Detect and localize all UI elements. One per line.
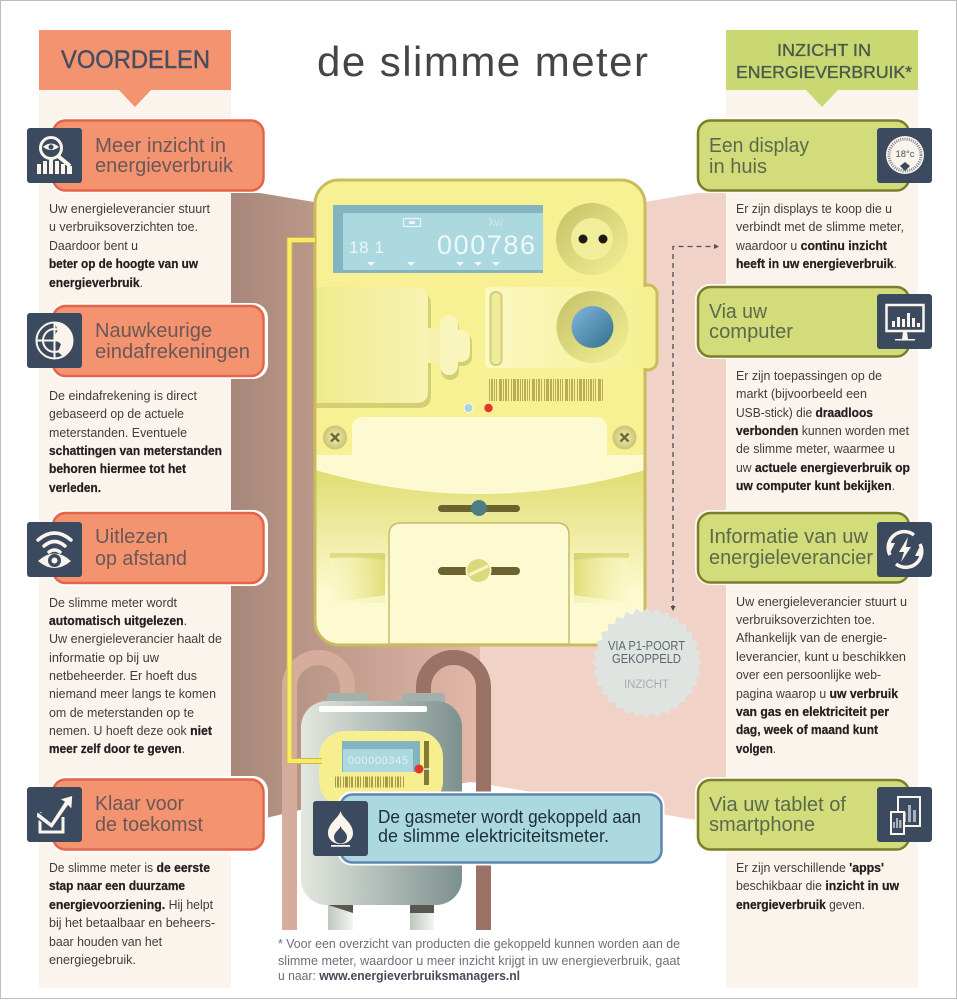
text block: klaar voor de toekomst <box>49 861 215 967</box>
badge text: VIA P1-POORT <box>608 639 685 653</box>
text block: nauwkeurige eindafrekeningen <box>49 389 222 495</box>
text block: meer inzicht: Uw energieleverancier stuurt <box>49 202 211 216</box>
footnote: * Voor een overzicht van producten die gekoppeld kunnen worden aan de <box>278 937 680 951</box>
text block: klaar voor de toekomst: energievoorziening. Hij helpt <box>49 898 214 912</box>
heading: voordelen <box>39 30 231 107</box>
text block: nauwkeurige eindafrekeningen: De eindafrekening is direct <box>49 389 198 403</box>
pipe: left gas pipe <box>290 658 348 930</box>
card title <box>95 793 203 836</box>
text block: uitlezen op afstand: niemand meer langs te komen <box>49 687 216 701</box>
text block: een display in huis: heeft in uw energieverbruik. <box>736 257 897 271</box>
gas meter body <box>301 701 462 905</box>
card title: op afstand <box>95 548 187 570</box>
text block: een display in huis: verbindt met de slimme meter, <box>736 220 904 234</box>
text block: klaar voor de toekomst: stap naar een duurzame <box>49 879 185 893</box>
text block: via uw computer: uw actuele energieverbruik op <box>736 461 910 475</box>
text block: uitlezen op afstand: netbeheerder. Er hoeft dus <box>49 669 197 683</box>
card title <box>709 301 793 343</box>
indicator lights <box>464 403 493 413</box>
text block: uitlezen op afstand: informatie op bij uw <box>49 651 160 665</box>
LCD display: kw <box>489 215 503 229</box>
panel: uitlezen op afstand <box>27 510 268 586</box>
text block: meer inzicht: u verbruiksoverzichten toe. <box>49 220 198 234</box>
side tab left <box>330 553 385 603</box>
card title: Klaar voor <box>95 793 184 815</box>
icon: cycle with bolt <box>877 522 932 577</box>
panel: left column background <box>39 90 231 988</box>
text block: informatie van uw energieleverancier: over een persoonlijke web- <box>736 668 881 682</box>
card title <box>709 526 873 569</box>
badge starburst <box>592 608 702 718</box>
meter protrusion right <box>625 285 657 370</box>
text block: uitlezen op afstand: Uw energieleverancier haalt de <box>49 632 222 646</box>
icon: gas flame <box>313 801 368 856</box>
electricity meter <box>315 180 657 650</box>
panel: informatie van uw energieleverancier <box>695 510 932 585</box>
meter outline <box>315 180 645 645</box>
card title <box>95 320 250 363</box>
LCD display: 18 1 <box>349 238 384 257</box>
icon: radar globe <box>27 313 82 368</box>
card title: Een display <box>709 135 809 157</box>
gas meter legs <box>328 903 434 930</box>
panel: klaar voor de toekomst <box>27 776 268 853</box>
card title: in huis <box>709 156 767 178</box>
blue button <box>556 291 628 363</box>
heading: voordelen: VOORDELEN <box>61 46 210 74</box>
card title <box>95 135 234 177</box>
barcode <box>489 379 604 401</box>
card title: de toekomst <box>95 814 203 836</box>
text block: informatie van uw energieleverancier: dag, week of maand kunt <box>736 723 879 737</box>
panel: via uw tablet of smartphone <box>695 777 932 852</box>
card title: Via uw tablet of <box>709 794 846 816</box>
LCD display: 000786 <box>437 230 535 260</box>
screw right <box>612 426 636 450</box>
icon: checkbox with arrow <box>27 787 82 842</box>
text block: informatie van uw energieleverancier: pagina waarop u uw verbruik <box>736 687 898 701</box>
dashed connection arrow <box>670 244 719 611</box>
upper slider <box>438 500 520 516</box>
meter right latch <box>485 287 654 368</box>
terminal door <box>389 523 569 644</box>
text block: een display in huis: Er zijn displays te koop die u <box>736 202 892 216</box>
card title: Nauwkeurige <box>95 320 212 342</box>
text block: informatie van uw energieleverancier: Uw energieleverancier stuurt u <box>736 595 907 609</box>
card title: Via uw <box>709 301 768 323</box>
LCD display <box>333 205 543 273</box>
text block: meer inzicht: beter op de hoogte van uw <box>49 257 198 271</box>
panel: nauwkeurige eindafrekeningen <box>27 303 268 379</box>
badge text <box>608 639 685 691</box>
footnote: slimme meter, waardoor u meer inzicht krijgt in uw energieverbruik, gaat <box>278 954 681 968</box>
text block: informatie van uw energieleverancier: Afhankelijk van de energie- <box>736 631 887 645</box>
text block: via uw computer: USB-stick) die draadloos <box>736 406 873 420</box>
text block: meer inzicht: Daardoor bent u <box>49 239 138 253</box>
text block: via uw computer: Er zijn toepassingen op de <box>736 369 882 383</box>
text block: via uw computer: verbonden kunnen worden met <box>736 424 910 438</box>
icon: magnifier over bars <box>27 128 82 183</box>
icon: tablet and phone <box>877 787 932 842</box>
meter body <box>315 180 645 645</box>
text block: klaar voor de toekomst: bij het betaalbaar en beheers- <box>49 916 215 930</box>
card title: Uitlezen <box>95 526 168 548</box>
text block: klaar voor de toekomst: energiegebruik. <box>49 953 136 967</box>
text block: uitlezen op afstand: om de meterstanden op te <box>49 706 194 720</box>
text block: meer inzicht <box>49 202 211 290</box>
text block: informatie van uw energieleverancier: leverancier, kunt u beschikken <box>736 650 906 664</box>
title: de slimme meter <box>317 38 648 85</box>
text block: uitlezen op afstand <box>49 596 222 756</box>
text block: uitlezen op afstand: nemen. U hoeft deze ook niet <box>49 724 213 738</box>
text block: nauwkeurige eindafrekeningen: meterstanden. Eventuele <box>49 426 187 440</box>
text block: via uw computer: uw computer kunt bekijken. <box>736 479 895 493</box>
side tab right <box>574 553 629 603</box>
text block: nauwkeurige eindafrekeningen: schattingen van meterstanden <box>49 444 222 458</box>
text block: via uw tablet of smartphone: energieverbruik geven. <box>736 898 865 912</box>
meter latch handle <box>426 315 472 380</box>
heading: inzicht in energieverbruik: ENERGIEVERBRUIK* <box>736 62 912 82</box>
background band: pink right <box>470 193 726 825</box>
text block: een display in huis: waardoor u continu inzicht <box>735 239 888 253</box>
text block: informatie van uw energieleverancier: van gas en elektriciteit per <box>736 705 889 719</box>
text block: klaar voor de toekomst: baar houden van het <box>49 935 163 949</box>
text block: nauwkeurige eindafrekeningen: verleden. <box>49 481 101 495</box>
panel: right column background <box>726 90 918 988</box>
card title: energieleverancier <box>709 547 873 569</box>
card title: computer <box>709 321 793 343</box>
card title <box>95 526 187 570</box>
card title: eindafrekeningen <box>95 341 250 363</box>
text block: via uw computer: markt (bijvoorbeeld een <box>736 387 867 401</box>
text block: via uw tablet of smartphone <box>736 861 899 912</box>
card title: Meer inzicht in <box>95 135 226 157</box>
gas meter <box>301 693 462 930</box>
badge text: INZICHT <box>624 679 669 691</box>
panel: via uw computer <box>695 284 932 359</box>
text block: uitlezen op afstand: De slimme meter wordt <box>49 596 178 610</box>
text block: informatie van uw energieleverancier: verbruiksoverzichten toe. <box>736 613 875 627</box>
gas meter display <box>342 741 420 772</box>
badge: via P1-poort <box>592 608 702 718</box>
footnote <box>278 937 681 983</box>
callout text <box>378 806 641 846</box>
icon: wifi eye <box>27 522 82 577</box>
text block: via uw tablet of smartphone: beschikbaar die inzicht in uw <box>736 879 899 893</box>
heading: inzicht in energieverbruik <box>726 30 918 107</box>
callout text: de slimme elektriciteitsmeter. <box>378 825 609 846</box>
lower slider <box>438 558 520 584</box>
card title <box>709 135 809 178</box>
text block: informatie van uw energieleverancier <box>736 595 907 756</box>
card title: Informatie van uw <box>709 526 869 548</box>
text block: klaar voor de toekomst: De slimme meter is de eerste <box>49 861 210 875</box>
meter inner parts <box>315 287 645 650</box>
panel: een display in huis <box>695 117 932 193</box>
text block: nauwkeurige eindafrekeningen: gebaseerd op de actuele <box>49 407 184 421</box>
badge text: GEKOPPELD <box>612 652 681 666</box>
card title: energieverbruik <box>95 155 234 177</box>
callout: gasmeter <box>313 792 664 866</box>
text block: informatie van uw energieleverancier: volgen. <box>736 742 776 756</box>
gas meter label <box>319 731 443 807</box>
panel: meer inzicht <box>27 118 266 193</box>
text block: meer inzicht: energieverbruik. <box>49 276 143 290</box>
text block: uitlezen op afstand: automatisch uitgelezen. <box>49 614 187 628</box>
text block: nauwkeurige eindafrekeningen: behoren hiermee tot het <box>49 462 187 476</box>
icon: thermostat display: 18°c <box>896 149 915 160</box>
pipe: right gas pipe <box>424 658 484 930</box>
background band: brown left <box>231 193 480 826</box>
heading: inzicht in energieverbruik: INZICHT IN <box>777 40 871 60</box>
text block: via uw tablet of smartphone: Er zijn verschillende 'apps' <box>736 861 884 875</box>
gas meter caps <box>327 693 445 702</box>
socket <box>556 203 628 275</box>
gas meter barcode <box>335 776 405 788</box>
text block: uitlezen op afstand: meer zelf door te geven. <box>49 742 185 756</box>
icon: thermostat display <box>877 128 932 183</box>
gas meter highlight <box>319 706 427 712</box>
gas meter indicator <box>414 741 431 785</box>
card title <box>709 794 846 836</box>
text block: een display in huis <box>735 202 904 271</box>
text block: via uw computer: de slimme meter, waarmee u <box>736 442 895 456</box>
text block: via uw computer <box>736 369 910 493</box>
gas meter display: 000000345 <box>348 755 408 767</box>
yellow wire <box>290 240 322 761</box>
icon: monitor with chart <box>877 294 932 349</box>
card title: smartphone <box>709 814 815 836</box>
footnote: u naar: www.energieverbruiksmanagers.nl <box>278 969 520 983</box>
screw left <box>323 426 347 450</box>
callout text: De gasmeter wordt gekoppeld aan <box>378 806 641 827</box>
